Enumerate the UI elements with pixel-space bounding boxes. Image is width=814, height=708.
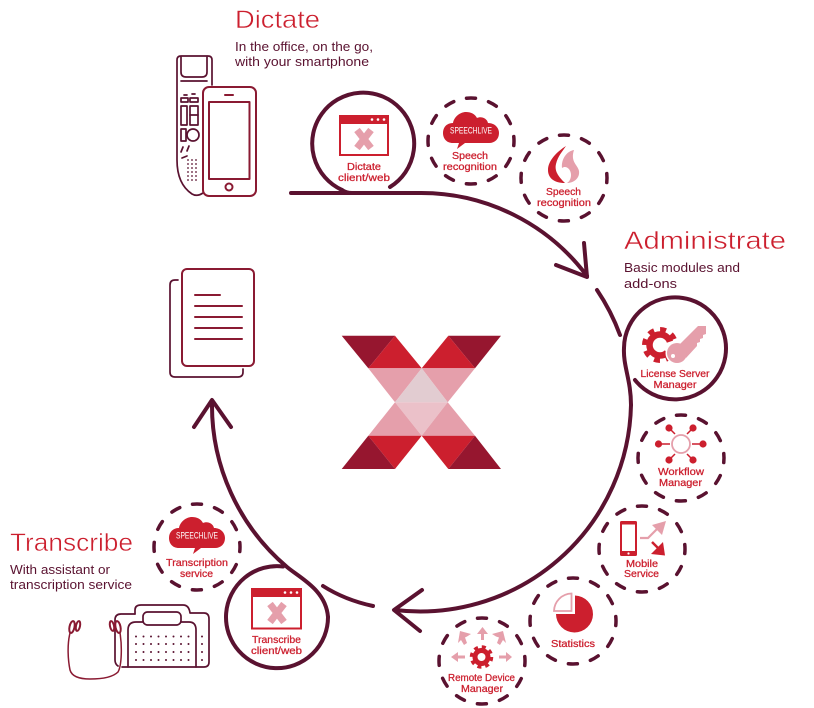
heading: Transcribe: Transcribe	[10, 529, 133, 557]
circle: License Server Manager: License Server	[640, 368, 710, 380]
circle: Transcription service	[150, 500, 244, 594]
cycle arrow: dictate to administrate	[291, 190, 587, 277]
icon: application window	[251, 588, 302, 630]
icon: gear with arrows	[451, 627, 512, 667]
circle: Dictate client/web: Dictate	[347, 161, 381, 173]
circle: SpeechLive speech recognition	[424, 94, 518, 188]
heading: Administrate: Administrate	[624, 227, 786, 255]
text: dictate description	[234, 39, 373, 69]
circle: Transcription service: service	[180, 568, 213, 580]
icon: document stack	[170, 269, 254, 377]
circle: License Server Manager: Manager	[654, 379, 697, 391]
circle: SpeechLive speech recognition: Speech	[452, 150, 488, 162]
text: transcribe description	[10, 562, 132, 592]
circle: Dictate client/web: client/web	[338, 172, 390, 184]
text: transcribe description: With assistant or	[10, 562, 111, 577]
circle: License Server Manager	[624, 297, 726, 399]
circle: Nuance speech recognition	[517, 131, 611, 225]
circle: Transcription service: Transcription	[166, 557, 228, 569]
cycle arrow: transcribe to document	[194, 400, 373, 617]
cycle arrow: administrate to transcribe	[394, 290, 631, 631]
circle: Remote Device Manager: Manager	[461, 683, 503, 695]
text: transcribe description: transcription service	[10, 577, 132, 592]
circle: Workflow Manager: Manager	[659, 477, 703, 489]
logo: central X	[342, 336, 501, 469]
circle: SpeechLive speech recognition: recognition	[443, 161, 497, 173]
text: dictate description: with your smartphone	[234, 54, 369, 69]
icon: foot pedal and headset	[68, 605, 209, 679]
circle: Dictate client/web	[312, 93, 414, 190]
circle: Remote Device Manager	[435, 614, 529, 708]
circle: Transcribe client/web: client/web	[251, 645, 302, 657]
circle: Nuance speech recognition: Speech	[546, 186, 581, 198]
heading: Administrate	[624, 227, 786, 291]
circle: Workflow Manager	[634, 411, 728, 505]
icon: SpeechLive cloud: SPEECHLIVE	[450, 126, 492, 136]
circle: Transcribe client/web: Transcribe	[252, 634, 301, 646]
icon: pie chart	[554, 594, 593, 632]
text: dictate description: In the office, on the go,	[235, 39, 373, 54]
text: administrate description: Basic modules and	[624, 260, 740, 275]
circle: Statistics: Statistics	[551, 638, 595, 650]
icon: gear and key	[644, 326, 706, 363]
circle: Transcribe client/web	[226, 566, 328, 668]
circle: Workflow Manager: Workflow	[658, 466, 704, 478]
heading: Dictate	[234, 6, 373, 69]
icon: flame	[548, 146, 579, 183]
icon: workflow nodes	[655, 424, 707, 464]
text: administrate description	[624, 260, 740, 291]
icon: SpeechLive cloud: SPEECHLIVE	[176, 530, 218, 542]
heading: Dictate: Dictate	[235, 6, 320, 34]
icon: dictaphone and smartphone	[177, 56, 256, 196]
circle: Mobile Service	[595, 502, 689, 596]
circle: Remote Device Manager: Remote Device	[448, 672, 515, 684]
text: administrate description: add-ons	[624, 276, 678, 291]
circle: Mobile Service: Service	[624, 568, 659, 580]
icon: application window	[339, 115, 389, 156]
circle: Nuance speech recognition: recognition	[537, 197, 591, 209]
circle: Mobile Service: Mobile	[626, 558, 658, 570]
circle: Statistics	[526, 574, 620, 668]
heading: Transcribe	[10, 529, 133, 592]
icon: phone with arrows	[620, 521, 666, 556]
